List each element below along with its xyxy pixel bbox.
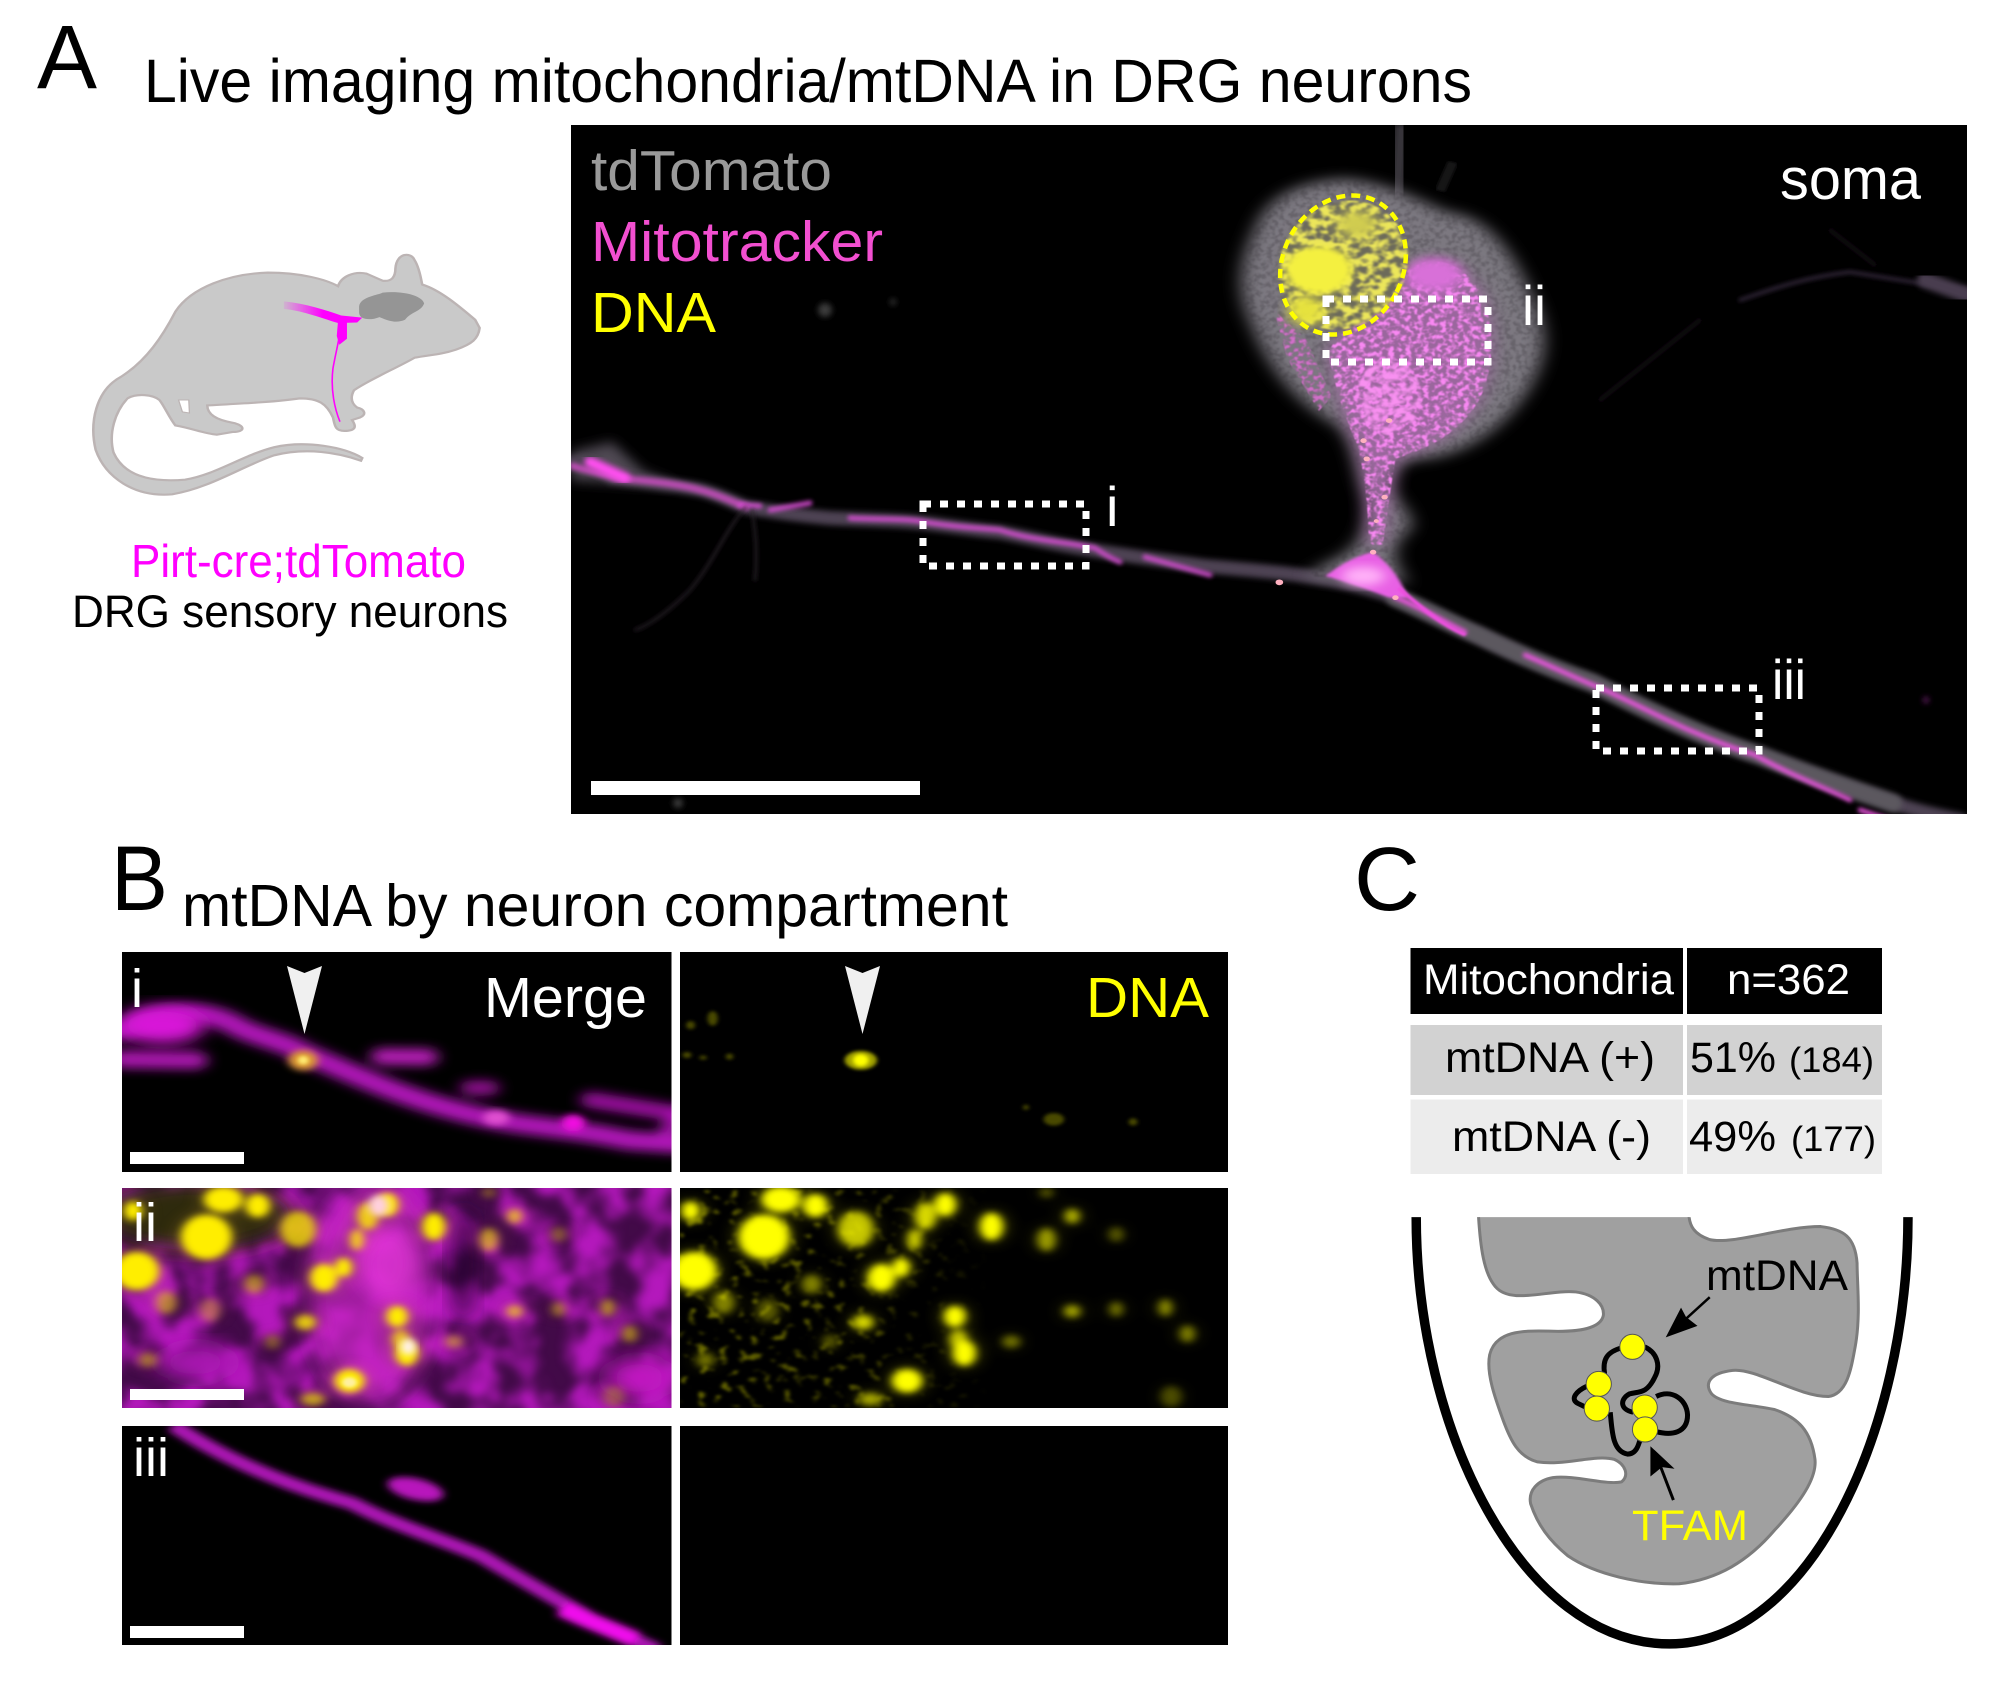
table: mitochondria mtDNA counts: mtDNA (+) [1445, 1034, 1655, 1082]
mtDNA strand [1574, 1347, 1688, 1454]
region box ii [1326, 299, 1488, 362]
table: mitochondria mtDNA counts: (177) [1791, 1120, 1876, 1159]
mouse cell type label: DRG sensory neurons [72, 586, 508, 637]
micrograph: soma and axon [571, 124, 1967, 820]
table: mitochondria mtDNA counts: (184) [1789, 1041, 1874, 1080]
table: mitochondria mtDNA counts: 49% [1689, 1113, 1776, 1161]
panel letter C: C [1354, 830, 1420, 930]
arrow to mtDNA [1666, 1297, 1710, 1337]
channel label: Merge: Merge [484, 966, 647, 1030]
mitochondrion [1478, 1211, 1858, 1584]
image: region ii DNA [672, 1187, 1228, 1408]
arrowhead: merge [287, 966, 322, 1034]
image: region i merge [120, 952, 680, 1172]
scale bar iii [130, 1626, 244, 1638]
image: region i DNA [680, 952, 1228, 1172]
region label i: i [1106, 475, 1118, 538]
arrow to TFAM [1650, 1446, 1675, 1500]
micrograph: soma layers [1241, 124, 1544, 635]
table: mitochondria mtDNA counts [1410, 948, 1882, 1174]
region label ii: ii [1522, 274, 1546, 337]
image legend: Mitotracker: Mitotracker [591, 210, 883, 274]
panel letter A: A [37, 8, 97, 108]
panel letter B: B [111, 828, 168, 930]
region box i [923, 504, 1086, 566]
image: region iii merge [122, 1425, 672, 1650]
heading: panel B: mtDNA by neuron compartment [182, 873, 1008, 939]
panel label ii: ii [133, 1193, 157, 1253]
label: mtDNA: mtDNA [1706, 1252, 1848, 1300]
cell membrane [1416, 1217, 1908, 1644]
image legend: tdTomato: tdTomato [591, 139, 832, 203]
title: panel A: Live imaging mitochondria/mtDNA in DRG neurons [144, 47, 1472, 115]
image: region ii merge [122, 1188, 672, 1408]
TFAM proteins [1584, 1334, 1658, 1442]
image legend: DNA: DNA [591, 281, 716, 345]
channel label: DNA: DNA [1086, 966, 1209, 1030]
mouse line label: Pirt-cre;tdTomato [131, 535, 466, 587]
arrowhead: DNA [845, 966, 880, 1034]
icon: mouse with DRG neuron [93, 255, 480, 495]
diagram: cell with mitochondrion [1416, 1211, 1908, 1644]
table: mitochondria mtDNA counts: n=362 [1727, 956, 1850, 1004]
image: region iii DNA [680, 1426, 1228, 1645]
scale bar: main image [591, 781, 920, 795]
table: mitochondria mtDNA counts: Mitochondria [1423, 956, 1674, 1004]
table: mitochondria mtDNA counts: mtDNA (-) [1452, 1113, 1651, 1161]
panel label i: i [131, 959, 143, 1019]
label: TFAM: TFAM [1632, 1502, 1748, 1550]
region label iii: iii [1772, 648, 1806, 711]
region box iii [1596, 688, 1759, 751]
scale bar ii [130, 1389, 244, 1400]
compartment label: soma: soma [1780, 147, 1922, 212]
cell body process marker: dim specks [673, 299, 1929, 808]
nucleus outline [1256, 173, 1430, 357]
panel label iii: iii [133, 1428, 169, 1488]
table: mitochondria mtDNA counts: 51% [1690, 1034, 1776, 1082]
scale bar i [130, 1152, 244, 1164]
